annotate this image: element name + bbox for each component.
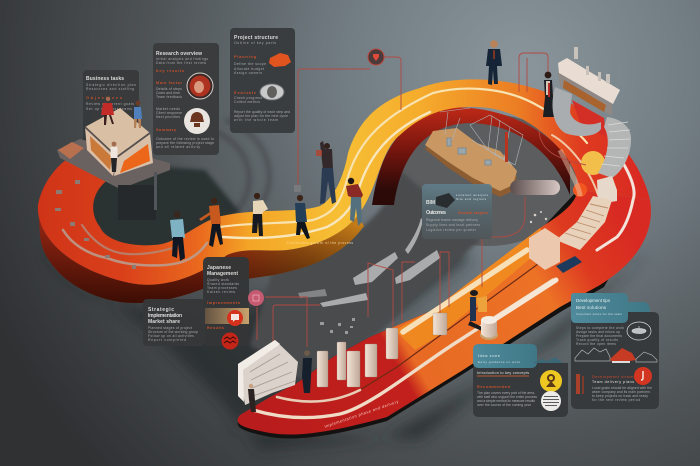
- panel: map callout: [422, 184, 492, 239]
- panel: lower left: Implementation: [148, 313, 182, 319]
- panel: top left: Set up the first teams: [86, 107, 132, 111]
- icon: white list badge: [541, 391, 561, 411]
- panel: lower right info: Steps to complete the work: [576, 326, 624, 330]
- floor shadow under ribbon: [45, 200, 650, 450]
- panel: lower right info: Local goals should be aligned with the: [592, 386, 652, 390]
- panel: top right: Assign owners: [234, 71, 262, 75]
- panel: lower middle: Results: [207, 326, 224, 330]
- panel: top middle: Next priorities: [156, 115, 180, 119]
- panel: map callout: Site and regions: [456, 197, 486, 201]
- panel: top right: Check progress: [234, 96, 262, 100]
- panel: lower middle: Management: [207, 271, 238, 277]
- dark hole in left loop: [86, 165, 240, 255]
- panel: top middle: Market needs: [156, 107, 180, 111]
- panel: top right: [230, 28, 295, 133]
- lower pillars: [317, 313, 447, 387]
- panel: lower left: Follow up on all activities: [148, 334, 194, 338]
- panel: map callout: Growth targets: [458, 211, 488, 215]
- small cube figure blue: [134, 101, 142, 128]
- grey floor inside arch: [400, 114, 576, 246]
- panel: lower right info: Record the open items: [576, 342, 616, 346]
- icon: red wave badge: [222, 332, 238, 350]
- background shadow arcs: [205, 120, 269, 215]
- round base on diagonal: [480, 316, 498, 340]
- panel: top middle: Initial analysis and findings: [156, 57, 208, 61]
- connector lines: [257, 53, 586, 353]
- panel: top middle: [153, 43, 219, 155]
- panel: top right: Planning: [234, 55, 257, 59]
- panel: top middle: Data from the first review: [156, 61, 207, 65]
- panel: lower middle: Improvements: [207, 301, 240, 305]
- cube inner figure: [110, 142, 118, 172]
- panel: lower middle: [203, 257, 249, 350]
- sun marker: [560, 150, 605, 197]
- panel: lower right info: to keep projects on track and ready: [592, 394, 648, 398]
- person: navy suit: [295, 195, 310, 239]
- panel: top left: [83, 70, 139, 146]
- lower ribbon caption: Implementation phase and delivery: [324, 399, 399, 429]
- person: woman in black dress: [543, 72, 556, 117]
- icon: red chat badge: [227, 310, 243, 326]
- panel: lower right info: Team delivery plans: [592, 380, 634, 384]
- panel: top left: Review of current goals: [86, 102, 134, 106]
- panel: lower left: Strategic: [148, 307, 174, 313]
- panel: bottom info: over the course of the coming year: [477, 403, 532, 407]
- seated worker on diagonal: [468, 290, 487, 331]
- icon: outlined dish: [627, 322, 651, 340]
- panel: lower right info: Development tips: [576, 298, 611, 303]
- panel: lower right info: Assign tasks and follow up: [576, 330, 620, 334]
- panel: top right: Define the scope: [234, 62, 266, 66]
- panel: top right: adjust the plan for the next cycle: [234, 114, 288, 118]
- icon: red meat circle: [187, 73, 213, 99]
- panel: top middle: Research overview: [156, 51, 202, 57]
- wire frames: [440, 108, 523, 165]
- panel: map callout: Outcomes: [426, 210, 446, 216]
- panel: lower middle: Kaizen review: [207, 290, 236, 294]
- panel: bottom info: Recommended: [477, 385, 511, 389]
- person: blue trousers: [316, 141, 336, 204]
- panel: lower left: [143, 299, 205, 346]
- cube platform: [57, 108, 170, 220]
- panel: lower middle: Team processes: [207, 286, 237, 290]
- panel: top middle: Details of steps: [156, 87, 182, 91]
- person: blue shirt: [170, 211, 185, 261]
- panel: bottom info: Early guidance on work: [478, 360, 520, 364]
- panel: lower middle: Quality work: [207, 278, 229, 282]
- panel: top middle: Summary: [156, 128, 177, 132]
- panel: top right: Report the quality of each step and: [234, 110, 290, 114]
- panel: map callout: Regional teams manage delivery: [426, 218, 478, 222]
- panel: lower left: Structure of the working group: [148, 330, 198, 334]
- panel: top middle: Team feedback: [156, 95, 182, 99]
- panel: top middle: Outcome of the review is used to: [156, 137, 214, 141]
- panel: top right: Outline of key parts: [234, 41, 276, 45]
- icon: red alert badge: [634, 367, 652, 385]
- inner wall of arch: [372, 107, 570, 205]
- icon: yellow pin badge: [540, 370, 562, 392]
- panel: top left: Objectives: [86, 96, 122, 100]
- top right shelf: [552, 47, 620, 136]
- panel: top right: with the whole team: [234, 118, 278, 122]
- icon: side label: [576, 374, 584, 394]
- panel: lower left: Planned stages of project: [148, 326, 192, 330]
- panel: top right: Project structure: [234, 35, 278, 41]
- scattered cubes: [320, 318, 355, 334]
- right stairs: [556, 117, 631, 250]
- panel: map callout: Logistics review per quarter: [426, 228, 477, 232]
- connector end box: [294, 185, 301, 192]
- panel: lower right info: for the next review period: [592, 398, 640, 402]
- panel: lower left: Market share: [148, 319, 180, 325]
- floor smears: [298, 218, 440, 307]
- outer wall of ribbon: [38, 205, 364, 303]
- panel: lower right info: [571, 293, 659, 409]
- panel: bottom info: Idea zone: [478, 353, 501, 358]
- person: white shirt: [252, 193, 268, 236]
- person: red top: [346, 178, 363, 226]
- band caption: Continuous growth of the process: [287, 241, 353, 245]
- icon: silver disc: [260, 84, 284, 100]
- panel: lower right info: Prepare the final documents: [576, 334, 622, 338]
- person: lower black suit: [302, 350, 312, 393]
- icon: pink node: [248, 290, 264, 306]
- panel: bottom info: [473, 344, 568, 417]
- map model: [425, 108, 523, 197]
- panel: top middle: Main factor: [156, 81, 183, 85]
- panel: lower right info: Important notes for the team: [576, 312, 622, 316]
- small cube figure red: [101, 97, 114, 125]
- panel: lower right info: Development strategy: [592, 375, 638, 379]
- panel: bottom info: with staff who support the entire process: [477, 395, 537, 399]
- panel: top left: Business tasks: [86, 76, 124, 82]
- ribbon stripes: [63, 89, 634, 265]
- icon: helmet circle: [184, 108, 210, 134]
- icon: top pin marker: [368, 49, 384, 65]
- skyline illustration: [575, 348, 657, 363]
- panel: lower right info: wider company and its main partners: [592, 390, 650, 394]
- small grey bollards on left loop: [55, 180, 136, 269]
- upper S ribbon surface: [38, 79, 650, 285]
- panel: top right: Evaluate: [234, 91, 256, 95]
- right base boxes: [529, 211, 582, 273]
- panel: bottom info: The plan covers every part of the area,: [477, 391, 535, 395]
- panel: map callout: Supply lines and local partners: [426, 223, 480, 227]
- panel: bottom info: Introduction to key concepts: [477, 371, 529, 375]
- panel: map callout: Location analysis: [456, 193, 488, 197]
- floor centre: [250, 170, 480, 380]
- panel: top middle: Client response: [156, 111, 182, 115]
- panel: lower right info: Track quality of results: [576, 338, 618, 342]
- panel: lower middle: Shared standards: [207, 282, 239, 286]
- lower ribbon stripes: [253, 250, 556, 417]
- person: orange sweater: [199, 198, 223, 247]
- lower diagonal ribbon: [238, 190, 651, 439]
- panel: top middle: Costs and time: [156, 91, 180, 95]
- panel: top right: Allocate budget: [234, 67, 264, 71]
- lower stair structure: [238, 340, 298, 405]
- icon: orange blob: [269, 53, 291, 67]
- panel: top middle: and all related activity: [156, 145, 200, 149]
- panel: lower left: Report completed: [148, 338, 186, 342]
- panel: lower right info: Best solutions: [576, 305, 607, 310]
- pill bar: [510, 180, 560, 195]
- panel: top left: Strategic direction plan: [86, 83, 136, 87]
- tan banner: [203, 308, 249, 324]
- panel: bottom info: and a simple method to measure results: [477, 399, 535, 403]
- panel: top right: Collect metrics: [234, 100, 260, 104]
- panel: map callout: BIM: [426, 200, 435, 206]
- person: small lower: [248, 384, 256, 412]
- panel: top middle: Key results: [156, 69, 184, 73]
- panel: top middle: prepare the following project stage: [156, 141, 214, 145]
- panel: top left: Resources and staffing: [86, 87, 134, 91]
- panel: lower middle: Japanese: [207, 265, 231, 271]
- person: man in suit top: [486, 40, 502, 85]
